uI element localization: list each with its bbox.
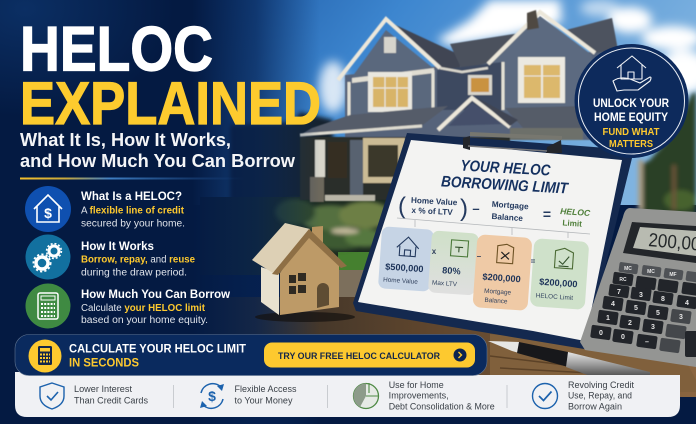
top-left texture glow [0, 0, 250, 180]
benefit: revolving credit [532, 380, 634, 412]
pen barrel [517, 342, 568, 367]
card operators: x [432, 247, 437, 256]
description: A flexible line of credit [81, 206, 185, 216]
card: mortgage balance: $200,000 [482, 272, 521, 284]
clipboard title [441, 156, 571, 198]
icon: house in hand [613, 56, 651, 91]
formula: Limit [562, 218, 583, 229]
house body [300, 10, 618, 202]
card: home value [378, 226, 434, 292]
benefit: home improvements: Improvements, [389, 391, 449, 401]
card: HELOC limit [530, 238, 589, 310]
benefit: lower interest [40, 383, 149, 409]
benefit: revolving credit: Revolving Credit [568, 380, 634, 390]
card: max LTV [428, 230, 479, 296]
badge ring [578, 48, 684, 154]
description [81, 206, 185, 230]
card: HELOC limit: $200,000 [539, 277, 578, 289]
subtitle [20, 129, 296, 171]
key labels: 5 [634, 305, 638, 312]
sky [180, 0, 696, 205]
clipboard title: BORROWING LIMIT [441, 173, 570, 198]
formula: – [472, 201, 480, 216]
button [264, 342, 475, 368]
benefit: flexible access [200, 384, 297, 408]
section: how it works [26, 234, 195, 280]
key labels: 4 [611, 301, 615, 308]
key labels: 4 [685, 300, 689, 307]
ground and table [200, 197, 696, 397]
button: TRY OUR FREE HELOC CALCULATOR [278, 351, 440, 362]
calculator keys [590, 262, 696, 357]
card operators: = [531, 257, 536, 266]
section: what is a HELOC [25, 186, 185, 232]
badge tagline [602, 126, 660, 150]
key labels: 7 [617, 289, 621, 296]
icon: yellow calculator [28, 340, 62, 372]
model window [289, 273, 306, 294]
badge tagline: MATTERS [609, 138, 653, 150]
formula: x % of LTV [411, 206, 453, 217]
benefit: flexible access: Flexible Access [234, 384, 297, 394]
heading: How Much You Can Borrow [81, 287, 231, 301]
bar background [15, 334, 487, 376]
key labels: 8 [661, 296, 665, 303]
model door [317, 283, 329, 308]
card: mortgage balance: Mortgage [484, 288, 512, 297]
wooden house model [252, 223, 355, 322]
badge headline: UNLOCK YOUR [593, 96, 669, 110]
key labels: RC [619, 277, 627, 283]
card: home value: Home Value [383, 276, 418, 286]
card: max LTV: Max LTV [432, 280, 458, 288]
card: mortgage balance [472, 234, 532, 311]
calculator display [633, 227, 696, 256]
benefit: flexible access: to Your Money [234, 396, 293, 406]
description: based on your home equity. [81, 315, 208, 326]
metal clip [463, 134, 562, 153]
icon: house with dollar [25, 186, 71, 232]
benefits strip [15, 372, 680, 417]
formula: = [543, 206, 551, 222]
key labels: 1 [606, 315, 610, 322]
benefit: revolving credit: Use, Repay, and [568, 391, 632, 401]
title: EXPLAINED: EXPLAINED [20, 70, 321, 137]
benefit: revolving credit: Borrow Again [568, 402, 622, 412]
formula [398, 193, 591, 229]
model front wall [280, 230, 339, 315]
clipboard board [353, 133, 634, 350]
trees right [638, 92, 696, 215]
card: max LTV: 80% [442, 265, 461, 276]
model roof [252, 223, 310, 273]
icon: house with dollar: $ [44, 205, 52, 221]
description: secured by your home. [81, 218, 185, 230]
badge tagline: FUND WHAT [602, 126, 660, 138]
clouds [319, 0, 696, 113]
card: mortgage balance: Balance [484, 297, 508, 305]
heading: How It Works [81, 239, 154, 253]
formula: ( [398, 193, 406, 220]
model chimney [312, 226, 323, 244]
dark trees left of house [230, 112, 333, 205]
benefit: flexible access: $ [208, 388, 216, 404]
formula rule [397, 218, 590, 238]
card: HELOC limit: HELOC Limit [536, 292, 573, 302]
heading: What Is a HELOC? [81, 189, 182, 203]
description: Borrow, repay, and reuse [81, 255, 195, 266]
benefit: lower interest: Than Credit Cards [74, 396, 149, 406]
model side wall [261, 267, 279, 315]
description [81, 255, 195, 279]
pen nib [488, 341, 519, 353]
pen metal end [566, 352, 650, 377]
card operators: – [477, 252, 482, 261]
bar heading: CALCULATE YOUR HELOC LIMIT [69, 342, 247, 356]
formula: Home Value [411, 196, 458, 207]
title: HELOC: HELOC [20, 14, 213, 84]
subtitle: and How Much You Can Borrow [20, 150, 296, 171]
key labels [599, 266, 689, 346]
calculator body [580, 208, 696, 367]
icon: gears [26, 234, 70, 280]
key labels: 0 [599, 330, 603, 337]
card operators [432, 247, 536, 266]
key labels: 5 [656, 310, 660, 317]
description: Calculate your HELOC limit [81, 303, 206, 314]
clipboard title: YOUR HELOC [460, 158, 552, 180]
formula: Mortgage [491, 200, 529, 211]
subtitle rule [20, 178, 245, 180]
key labels: 0 [621, 334, 625, 341]
clipboard [353, 133, 634, 350]
call to action bar [15, 334, 487, 376]
bushes [275, 199, 391, 250]
benefit: home improvements [353, 380, 495, 412]
key labels: 3 [651, 324, 655, 331]
key labels: 3 [679, 314, 683, 321]
description: during the draw period. [81, 268, 187, 279]
badge: unlock your home equity [574, 44, 688, 158]
strip background [15, 372, 680, 417]
benefit: home improvements: Use for Home [389, 380, 444, 390]
key labels: – [645, 339, 649, 346]
description [81, 303, 208, 326]
badge headline: HOME EQUITY [594, 110, 668, 124]
formula: Balance [491, 212, 524, 223]
model shadow [255, 312, 355, 322]
model eave [272, 229, 347, 275]
key labels: MF [669, 272, 677, 278]
key labels: MC [624, 266, 632, 272]
benefit: home improvements: Debt Consolidation & More [389, 402, 495, 412]
benefit: lower interest: Lower Interest [74, 384, 133, 394]
formula: ) [460, 195, 468, 222]
calculator [580, 208, 696, 367]
key labels: 3 [639, 292, 643, 299]
bar subheading: IN SECONDS [69, 356, 139, 370]
key labels: MC [647, 269, 655, 275]
left navy fade over photo [0, 0, 320, 424]
badge disc [574, 44, 688, 158]
pen [488, 341, 650, 377]
section: how much you can borrow [26, 284, 231, 328]
icon: calculator [26, 284, 70, 328]
badge headline [593, 96, 669, 124]
formula: HELOC [560, 206, 591, 218]
clipboard paper [358, 140, 622, 341]
card: home value: $500,000 [385, 262, 424, 274]
key labels: 2 [628, 320, 632, 327]
subtitle: What It Is, How It Works, [20, 129, 231, 150]
calculator screen frame [623, 222, 696, 263]
